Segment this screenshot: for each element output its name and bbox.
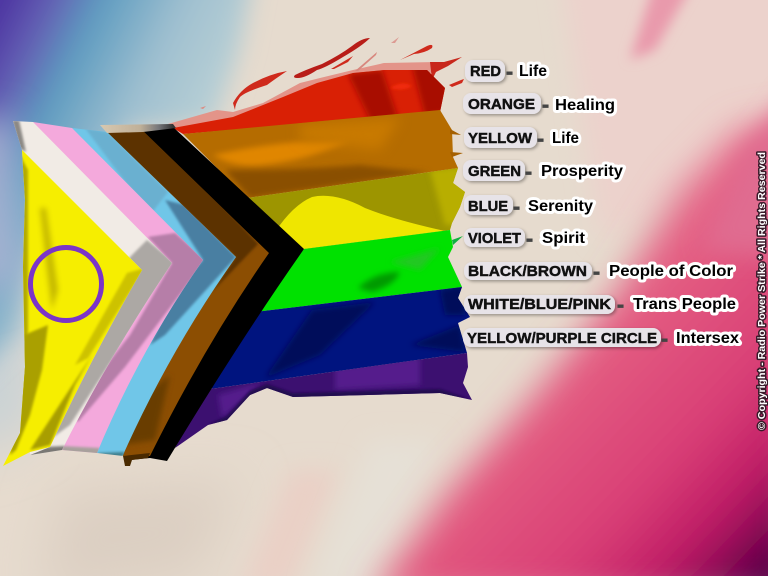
black chevron	[125, 127, 304, 461]
legend row: black/brown: People of Color	[609, 263, 733, 280]
legend row: blue	[464, 195, 593, 219]
legend row: violet: Spirit	[542, 230, 585, 247]
legend: colour meanings	[463, 60, 739, 351]
purple stripe	[175, 353, 472, 448]
red stripe	[168, 57, 462, 134]
legend row: yellow/purple circle: -	[661, 328, 668, 351]
bottom edge drips	[123, 453, 150, 466]
legend row: green: -	[525, 161, 532, 184]
legend row: yellow	[464, 127, 579, 151]
orange stripe	[183, 110, 463, 198]
legend row: black/brown: -	[593, 261, 600, 284]
top edge fade over chevrons	[100, 124, 176, 133]
white chevron	[13, 121, 172, 455]
legend row: orange: -	[542, 94, 549, 117]
legend row: green: GREEN	[468, 163, 521, 180]
red paint splatter	[200, 37, 464, 110]
legend row: red: -	[506, 61, 513, 84]
pink chevron	[33, 122, 203, 453]
legend row: yellow: YELLOW	[468, 130, 533, 147]
legend row: yellow/purple circle: YELLOW/PURPLE CIRCLE	[467, 330, 657, 347]
brown chevron	[107, 131, 269, 458]
brown chevron shading	[100, 126, 258, 445]
progress chevrons	[3, 120, 304, 466]
legend row: red	[465, 60, 547, 84]
legend row: green: Prosperity	[541, 163, 623, 180]
legend row: orange	[463, 93, 615, 117]
legend row: orange: Healing	[555, 97, 615, 114]
legend row: white/blue/pink	[464, 294, 736, 317]
legend row: violet	[464, 228, 585, 251]
green stripe	[255, 230, 463, 312]
pink chevron shading	[62, 233, 206, 456]
intersex purple circle	[30, 248, 102, 320]
yellow field	[3, 150, 142, 466]
legend row: violet: -	[526, 228, 533, 251]
white chevron shading	[12, 120, 175, 458]
blue stripe	[203, 285, 470, 390]
legend row: black/brown: BLACK/BROWN	[468, 263, 587, 280]
rainbow stripes	[168, 37, 472, 448]
legend row: blue: BLUE	[468, 198, 508, 215]
legend row: green	[463, 160, 623, 184]
yellow field folds	[10, 155, 145, 455]
legend row: white/blue/pink: Trans People	[633, 296, 736, 313]
legend row: blue: -	[513, 196, 520, 219]
light blue chevron	[72, 128, 236, 455]
legend row: orange: ORANGE	[468, 96, 535, 113]
legend row: white/blue/pink: -	[617, 294, 624, 317]
legend row: violet: VIOLET	[468, 230, 521, 247]
legend row: yellow/purple circle	[463, 328, 739, 351]
legend row: yellow/purple circle: Intersex	[676, 330, 739, 347]
legend row: blue: Serenity	[528, 198, 593, 215]
yellow stripe	[247, 165, 470, 249]
copyright notice: © Copyright - Radio Power Strike * All Rights Reserved	[756, 152, 768, 430]
legend row: black/brown	[464, 261, 733, 284]
light blue chevron shading	[85, 128, 236, 458]
legend row: white/blue/pink: WHITE/BLUE/PINK	[468, 296, 611, 313]
legend row: red: Life	[519, 63, 547, 80]
legend row: yellow: -	[537, 128, 544, 151]
legend row: yellow: Life	[552, 130, 579, 147]
legend row: red: RED	[470, 63, 501, 80]
